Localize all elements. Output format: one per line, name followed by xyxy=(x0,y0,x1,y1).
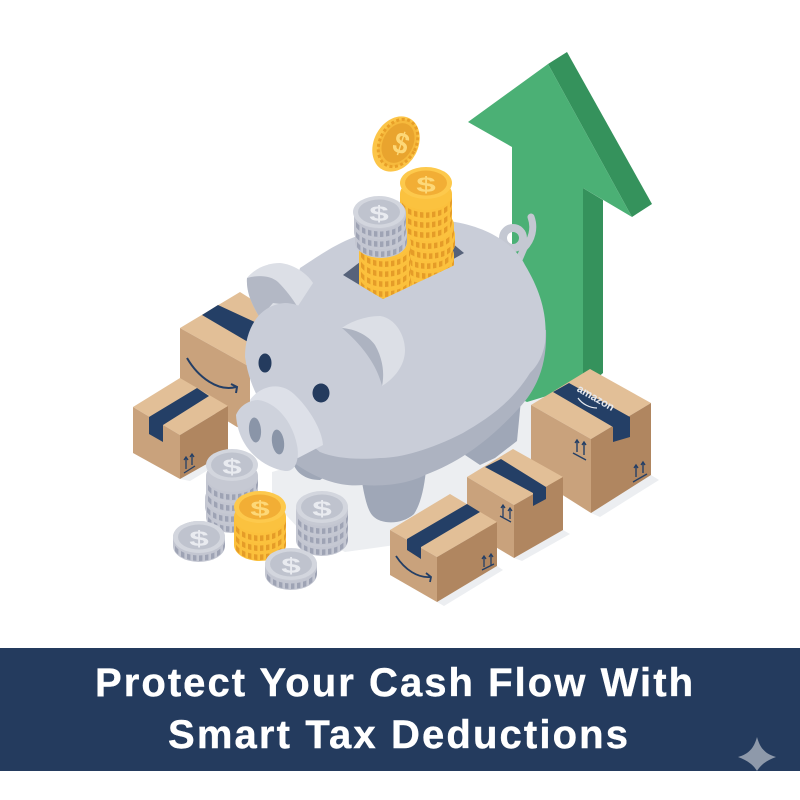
smile logo xyxy=(187,358,237,393)
large right cardboard box: amazon xyxy=(575,383,616,414)
pig eyes xyxy=(258,354,330,402)
silver stack back: $ xyxy=(222,456,242,479)
pig legs xyxy=(293,400,521,522)
smile logo xyxy=(396,556,431,582)
arrow head side xyxy=(548,52,652,217)
coin slot xyxy=(343,243,464,299)
silver stack right xyxy=(296,491,348,556)
back left cardboard box xyxy=(180,292,300,430)
up arrows mark xyxy=(633,462,647,482)
arrow shaft side xyxy=(583,188,603,390)
silver stack in slot xyxy=(353,196,407,258)
tall gold stack: $ xyxy=(416,174,436,197)
sparkle icon xyxy=(738,737,776,771)
front cardboard box xyxy=(390,494,497,602)
up arrows mark xyxy=(500,505,512,522)
silver stack back xyxy=(205,449,258,533)
tall gold stack xyxy=(400,167,455,290)
large right cardboard box xyxy=(531,369,651,513)
single silver coin front: $ xyxy=(281,555,301,578)
piggy bank xyxy=(236,167,546,522)
title line 1: Protect Your Cash Flow With xyxy=(95,661,693,705)
single silver coin left: $ xyxy=(189,528,209,551)
falling gold coin: $ xyxy=(389,126,413,162)
growth arrow xyxy=(468,52,652,402)
nostrils xyxy=(248,417,286,455)
single silver coin left xyxy=(173,521,225,562)
pig body xyxy=(280,221,546,459)
arrow front face xyxy=(468,64,632,402)
gold under silver stack xyxy=(359,237,411,299)
up arrows mark xyxy=(573,440,586,460)
gold stack: $ xyxy=(250,498,270,521)
near ear xyxy=(342,316,405,386)
up arrows mark xyxy=(184,454,195,473)
tape with amazon label xyxy=(553,383,630,442)
silver stack in slot: $ xyxy=(369,203,389,226)
falling gold coin xyxy=(363,108,429,180)
pig head xyxy=(245,303,345,452)
ground shadow xyxy=(180,395,659,606)
pig belly shade xyxy=(280,300,546,486)
gold stack xyxy=(234,491,286,561)
bottom left coins xyxy=(173,449,348,590)
pig tail xyxy=(503,217,533,262)
silver stack right: $ xyxy=(312,498,332,521)
up arrows mark xyxy=(482,554,494,570)
coins in slot xyxy=(353,167,455,308)
smile on label xyxy=(578,398,597,408)
pig snout xyxy=(236,386,323,471)
small left cardboard box xyxy=(133,378,228,479)
far ear xyxy=(247,263,313,318)
single silver coin front xyxy=(265,548,317,590)
middle cardboard box xyxy=(467,449,563,558)
title banner xyxy=(0,648,800,771)
title line 2: Smart Tax Deductions xyxy=(168,713,628,757)
